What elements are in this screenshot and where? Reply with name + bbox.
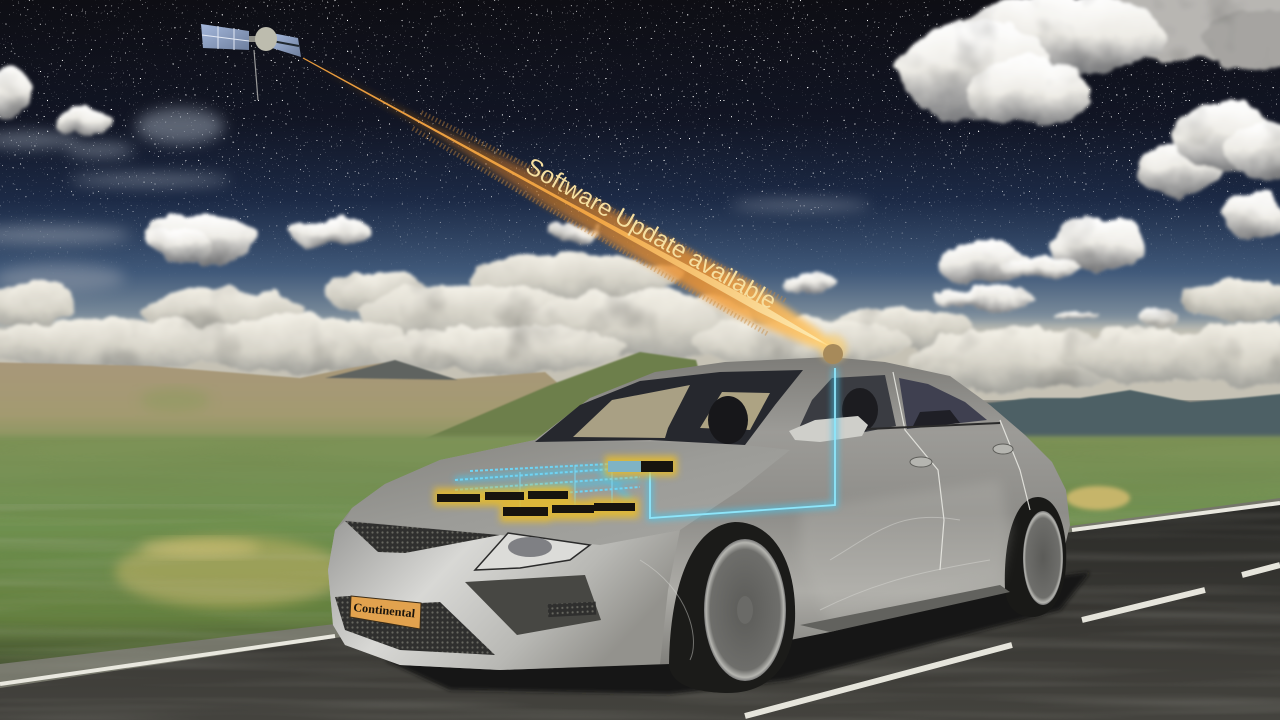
front side window [799, 375, 896, 433]
hills: left [0, 352, 720, 450]
background: night sky [0, 0, 1280, 400]
license plate [350, 596, 421, 629]
ghost wiring overlay [640, 517, 990, 660]
windshield [535, 370, 803, 445]
beam text: Software Update available [521, 153, 781, 315]
road edge line [0, 503, 1280, 684]
car body [328, 357, 1070, 670]
lower grille [335, 596, 495, 655]
side sheen [800, 480, 1010, 622]
icon: satellite [201, 24, 301, 100]
rear wheel [1005, 497, 1066, 617]
side mirror [789, 416, 868, 442]
clouds: faint wisps [0, 108, 870, 292]
field: motion blurred meadow [0, 436, 1280, 686]
hills: right [980, 390, 1280, 440]
door handles [910, 457, 932, 467]
car shadow [385, 572, 1090, 694]
upper grille [345, 521, 500, 553]
license plate: Continental [353, 600, 416, 621]
front wheel [669, 522, 795, 693]
rear side window [899, 378, 987, 429]
beam: satellite data link [294, 41, 847, 368]
headlight [475, 533, 590, 570]
control units: glowing chips [434, 456, 677, 522]
network: blue data lines [455, 368, 835, 518]
door lines [893, 372, 1030, 570]
clouds: horizon haze [0, 325, 1280, 405]
car [328, 357, 1070, 693]
clouds: upper sky [0, 0, 1280, 329]
lower vent [465, 575, 601, 635]
lane dashes [745, 565, 1280, 716]
road [0, 498, 1280, 720]
hood [345, 440, 790, 545]
clouds: horizon bank [0, 252, 1280, 392]
starfield [0, 0, 1280, 280]
icon: roof antenna receiver [819, 334, 847, 364]
front bumper [328, 521, 680, 670]
